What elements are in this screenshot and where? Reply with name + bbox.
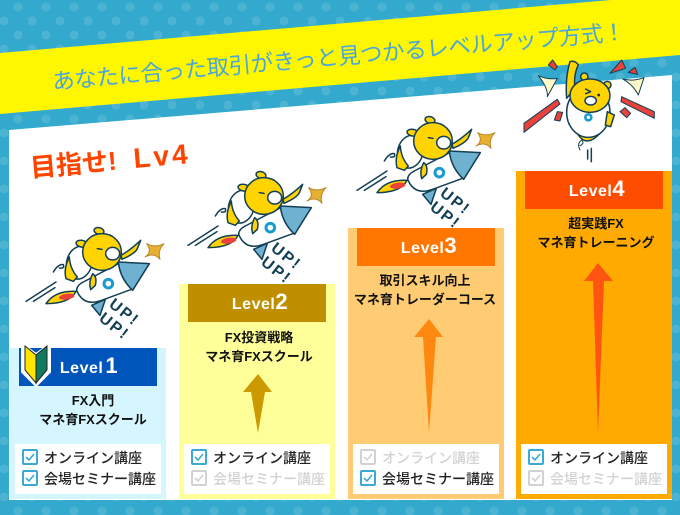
heading: goal: 目指せ! Lv4 <box>29 138 192 183</box>
arrow: level 4 <box>584 263 613 433</box>
mascot: rocket level 1 <box>26 226 164 344</box>
level 1 options: 会場セミナー講座 <box>44 471 156 487</box>
level 1 options <box>15 444 161 494</box>
level 2 header <box>188 284 326 322</box>
level 1 course name: マネ育FXスクール <box>39 412 147 427</box>
panel: level 1 <box>10 344 166 499</box>
level 2 label: Level2 <box>232 289 288 314</box>
level 1 course name: FX入門 <box>72 393 114 408</box>
level 2 course name: マネ育FXスクール <box>205 349 313 364</box>
level 3 options: オンライン講座 <box>382 450 480 466</box>
level 1 label: Level1 <box>60 353 118 378</box>
mascot: rocket level 2 <box>188 170 326 288</box>
mascot: rocket level 2: UP! <box>268 240 304 274</box>
mascot: rocket level 1: UP! <box>96 310 132 344</box>
level 3 course name: 取引スキル向上 <box>379 273 471 288</box>
mascot: rocket level 3: UP! <box>427 199 463 233</box>
title banner <box>0 0 680 114</box>
level 2 course name <box>205 330 313 364</box>
level 4 course name <box>537 216 655 250</box>
mascot: rocket level 1: UP! <box>106 296 142 330</box>
mascot: rocket level 2: UP! <box>258 254 294 288</box>
level 1 header <box>19 348 157 386</box>
level 2 course name: FX投資戦略 <box>225 330 293 345</box>
level 4 options: 会場セミナー講座 <box>550 471 662 487</box>
panel: level 3 <box>348 228 504 499</box>
level 3 header <box>357 228 495 266</box>
level 4 label: Level4 <box>569 176 625 201</box>
mascot: jumping level 4 <box>524 60 654 162</box>
level 3 options <box>353 444 499 494</box>
icon: beginner mark <box>22 344 50 386</box>
level 4 header <box>525 171 663 209</box>
arrow: level 2 <box>243 374 272 433</box>
level 3 course name: マネ育トレーダーコース <box>354 292 496 307</box>
level 4 course name: 超実践FX <box>568 216 624 231</box>
panel: level 4 <box>516 171 672 499</box>
level 3 label: Level3 <box>401 233 457 258</box>
level 1 options: オンライン講座 <box>44 450 142 466</box>
level 2 options: 会場セミナー講座 <box>213 471 325 487</box>
title banner: あなたに合った取引がきっと見つかるレベルアップ方式！ <box>51 19 626 94</box>
level 4 course name: マネ育トレーニング <box>537 235 655 250</box>
level 3 course name <box>354 273 496 307</box>
level 2 options <box>184 444 330 494</box>
level 1 course name <box>39 393 147 427</box>
level 4 options: オンライン講座 <box>550 450 648 466</box>
panel: level 2 <box>179 284 335 499</box>
level 4 options <box>521 444 667 494</box>
arrow: level 3 <box>414 319 443 433</box>
mascot: rocket level 3 <box>357 115 495 233</box>
level 2 options: オンライン講座 <box>213 450 311 466</box>
level 3 options: 会場セミナー講座 <box>382 471 494 487</box>
mascot: rocket level 3: UP! <box>437 185 473 219</box>
